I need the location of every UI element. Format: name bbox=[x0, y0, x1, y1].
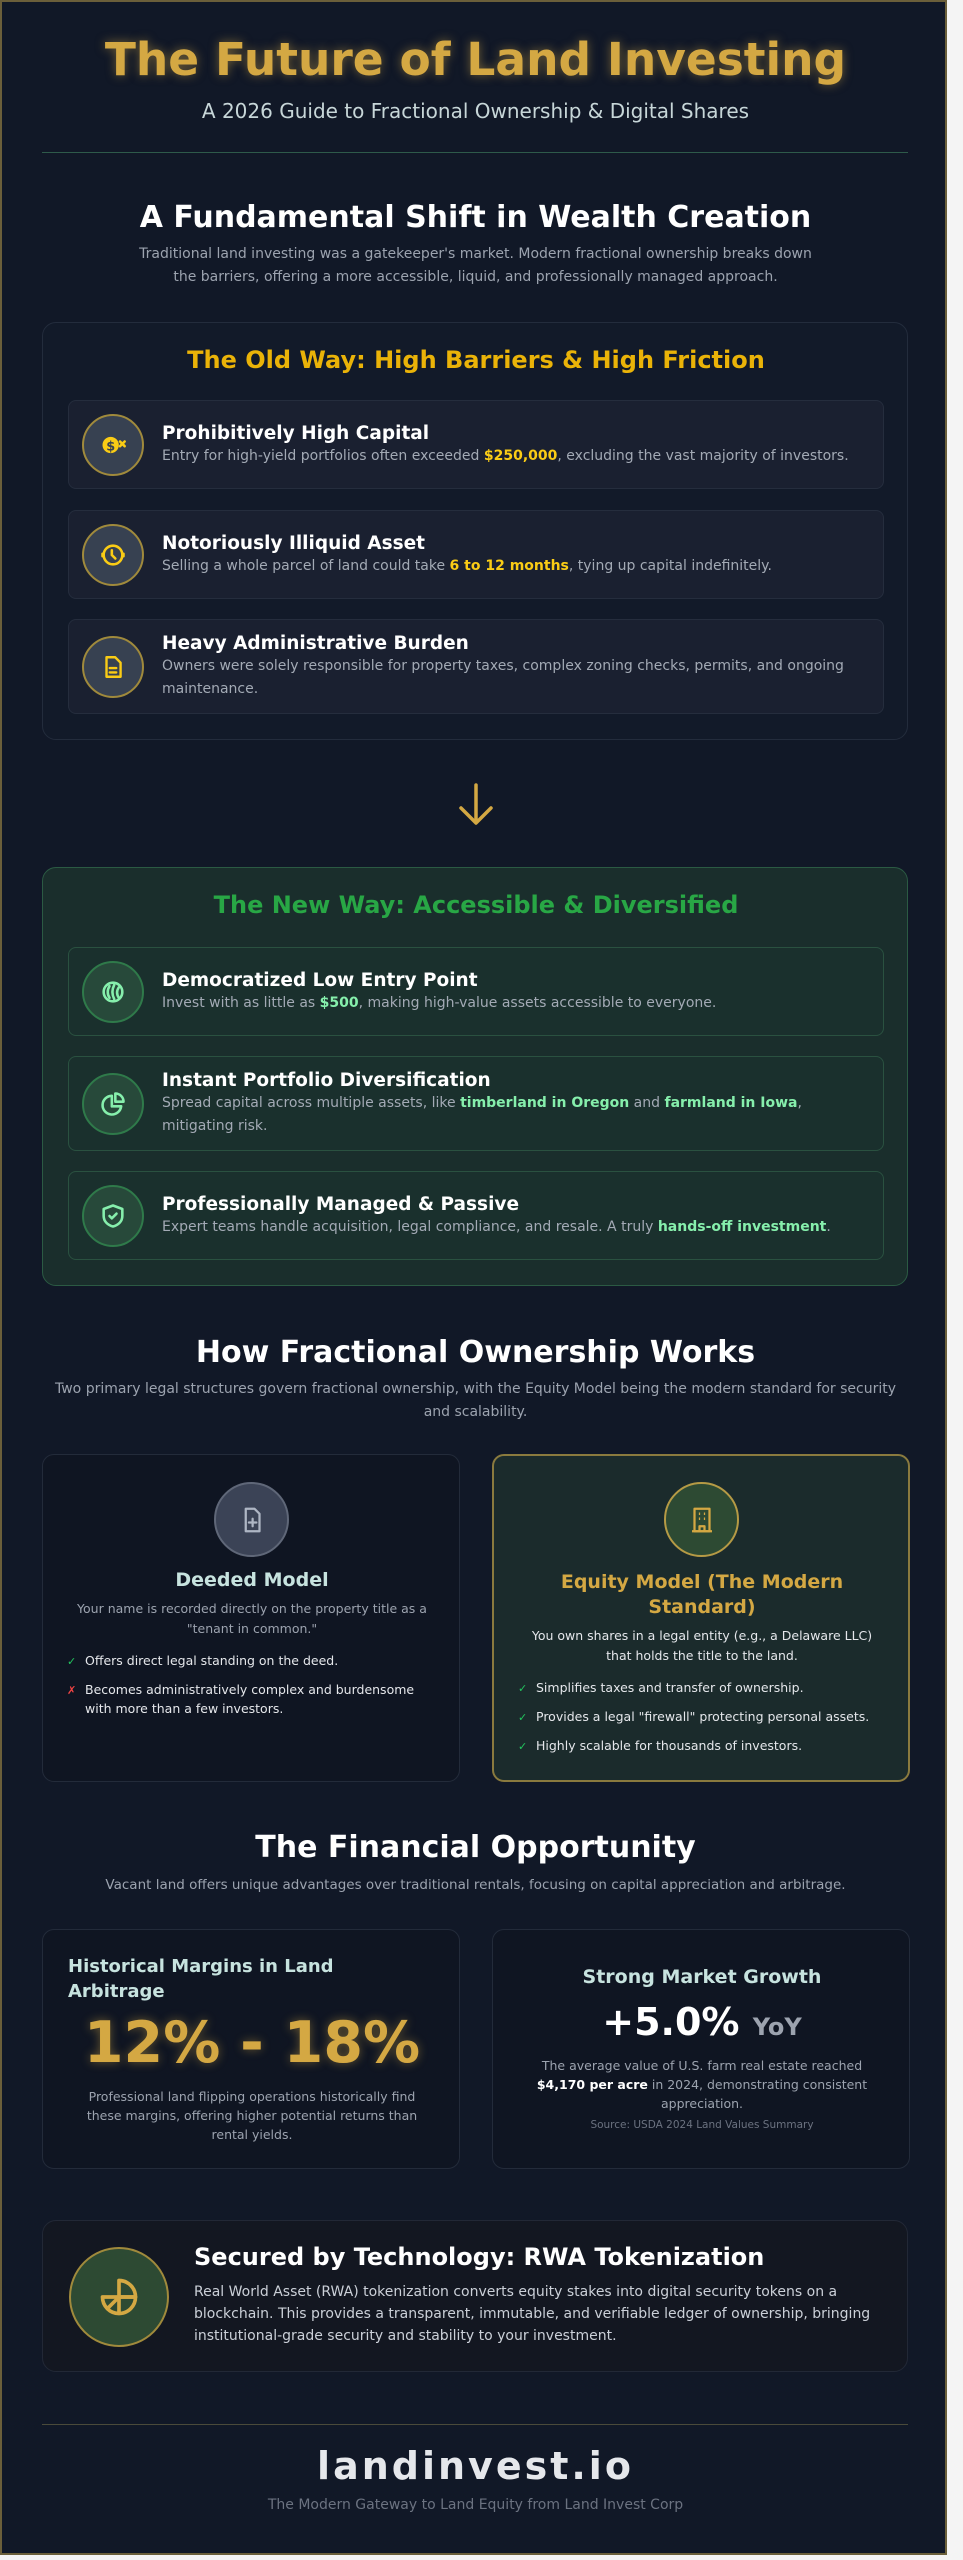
item: managed bbox=[68, 1171, 884, 1260]
icon: shield bbox=[82, 1184, 144, 1246]
equity bullets: Provides a legal "firewall" protecting personal assets. bbox=[536, 1709, 869, 1724]
deeded description: Your name is recorded directly on the property title as a "tenant in common." bbox=[77, 1601, 427, 1636]
item: admin burden: Heavy Administrative Burden bbox=[162, 633, 469, 654]
icon: building bbox=[664, 1482, 739, 1557]
equity description: You own shares in a legal entity (e.g., a Delaware LLC) that holds the title to the land. bbox=[532, 1628, 872, 1663]
equity bullets: ✓ bbox=[518, 1740, 527, 1753]
footer brand: landinvest.io bbox=[317, 2444, 634, 2488]
stat: +5.0% YoY: +5.0% YoY bbox=[602, 2000, 802, 2044]
deeded title: Deeded Model bbox=[175, 1569, 329, 1591]
item: high capital: Entry for high-yield portfolios often exceeded $250,000, excluding the vast majority of investors. bbox=[162, 448, 849, 464]
stat: 12-18%: 12% - 18% bbox=[84, 2010, 420, 2076]
equity title: Equity Model (The Modern Standard) bbox=[561, 1571, 843, 1618]
intro text: Traditional land investing was a gatekeeper's market. Modern fractional ownership breaks down the barriers, offering a more accessible, liquid, and professionally managed approach. bbox=[139, 246, 812, 285]
item: illiquid: Notoriously Illiquid Asset bbox=[162, 532, 425, 554]
icon: clock bbox=[82, 524, 144, 586]
card: margins bbox=[42, 1929, 460, 2169]
item: high capital bbox=[68, 400, 884, 489]
margins description: Professional land flipping operations historically find these margins, offering higher potential returns than rental yields. bbox=[87, 2089, 417, 2142]
item: illiquid bbox=[68, 510, 884, 599]
card: deeded model bbox=[42, 1454, 460, 1782]
arrow: down bbox=[459, 783, 493, 825]
new way heading: The New Way: Accessible & Diversified bbox=[214, 891, 738, 919]
footer tagline: The Modern Gateway to Land Equity from Land Invest Corp bbox=[268, 2497, 683, 2513]
item: diversification: Instant Portfolio Diversification bbox=[162, 1070, 491, 1091]
panel: old way bbox=[42, 322, 908, 740]
deeded bullets: Offers direct legal standing on the deed. bbox=[85, 1653, 338, 1668]
item: diversification: Spread capital across multiple assets, like timberland in Oregon and farmland in Iowa, mitigating risk. bbox=[162, 1095, 802, 1134]
equity bullets: Simplifies taxes and transfer of ownership. bbox=[536, 1680, 804, 1695]
panel: new way bbox=[42, 867, 908, 1286]
icon: document bbox=[82, 636, 144, 698]
heading: how it works: How Fractional Ownership Works bbox=[196, 1335, 755, 1370]
icon: token bbox=[69, 2247, 169, 2347]
growth description: The average value of U.S. farm real estate reached $4,170 per acre in 2024, demonstrating consistent appreciation. bbox=[537, 2058, 867, 2111]
how intro text: Two primary legal structures govern fractional ownership, with the Equity Model being the modern standard for security and scalability. bbox=[55, 1381, 896, 1420]
heading: financial opportunity: The Financial Opportunity bbox=[255, 1830, 696, 1865]
title: The Future of Land Investing bbox=[105, 33, 846, 86]
panel: RWA tokenization bbox=[42, 2220, 908, 2372]
icon: coins bbox=[82, 960, 144, 1022]
item: low entry: Democratized Low Entry Point bbox=[162, 970, 478, 990]
equity bullets: ✓ bbox=[518, 1711, 527, 1724]
item: admin burden bbox=[68, 619, 884, 714]
financial intro text: Vacant land offers unique advantages over traditional rentals, focusing on capital appreciation and arbitrage. bbox=[105, 1877, 846, 1893]
icon: money: $ bbox=[106, 439, 115, 454]
source note: Source: USDA 2024 Land Values Summary bbox=[590, 2119, 814, 2131]
icon: money bbox=[82, 414, 144, 476]
item: admin burden: Owners were solely responsible for property taxes, complex zoning checks, permits, and ongoing maintenance. bbox=[162, 658, 844, 697]
heading: fundamental shift: A Fundamental Shift in Wealth Creation bbox=[140, 200, 811, 235]
item: managed: Expert teams handle acquisition, legal compliance, and resale. A truly hands-off investment. bbox=[162, 1218, 831, 1234]
old way heading: The Old Way: High Barriers & High Friction bbox=[187, 346, 765, 374]
equity bullets bbox=[518, 1680, 869, 1753]
growth title: Strong Market Growth bbox=[583, 1966, 821, 1988]
margins title: Historical Margins in Land Arbitrage bbox=[68, 1956, 334, 2002]
deeded bullets: ✓ bbox=[67, 1655, 76, 1668]
card: equity model bbox=[492, 1454, 910, 1782]
RWA title: Secured by Technology: RWA Tokenization bbox=[194, 2243, 764, 2271]
RWA text: Real World Asset (RWA) tokenization converts equity stakes into digital security tokens on a blockchain. This provides a transparent, immutable, and verifiable ledger of ownership, bringing institutional-grade security and stability to your investment. bbox=[194, 2284, 870, 2344]
subtitle: A 2026 Guide to Fractional Ownership & Digital Shares bbox=[202, 99, 749, 123]
item: low entry bbox=[68, 947, 884, 1036]
item: high capital: Prohibitively High Capital bbox=[162, 422, 429, 444]
item: low entry: Invest with as little as $500, making high-value assets accessible to everyone. bbox=[162, 994, 716, 1010]
equity bullets: Highly scalable for thousands of investors. bbox=[536, 1738, 802, 1753]
icon: file plus bbox=[214, 1482, 289, 1557]
deeded bullets: Becomes administratively complex and burdensome with more than a few investors. bbox=[85, 1682, 414, 1716]
equity bullets: ✓ bbox=[518, 1682, 527, 1695]
item: managed: Professionally Managed & Passive bbox=[162, 1194, 519, 1214]
item: illiquid: Selling a whole parcel of land could take 6 to 12 months, tying up capital indefinitely. bbox=[162, 558, 772, 574]
deeded bullets: ✗ bbox=[67, 1684, 76, 1697]
card: market growth bbox=[492, 1929, 910, 2169]
deeded bullets bbox=[67, 1653, 414, 1716]
item: diversification bbox=[68, 1056, 884, 1151]
icon: pie chart bbox=[82, 1072, 144, 1134]
